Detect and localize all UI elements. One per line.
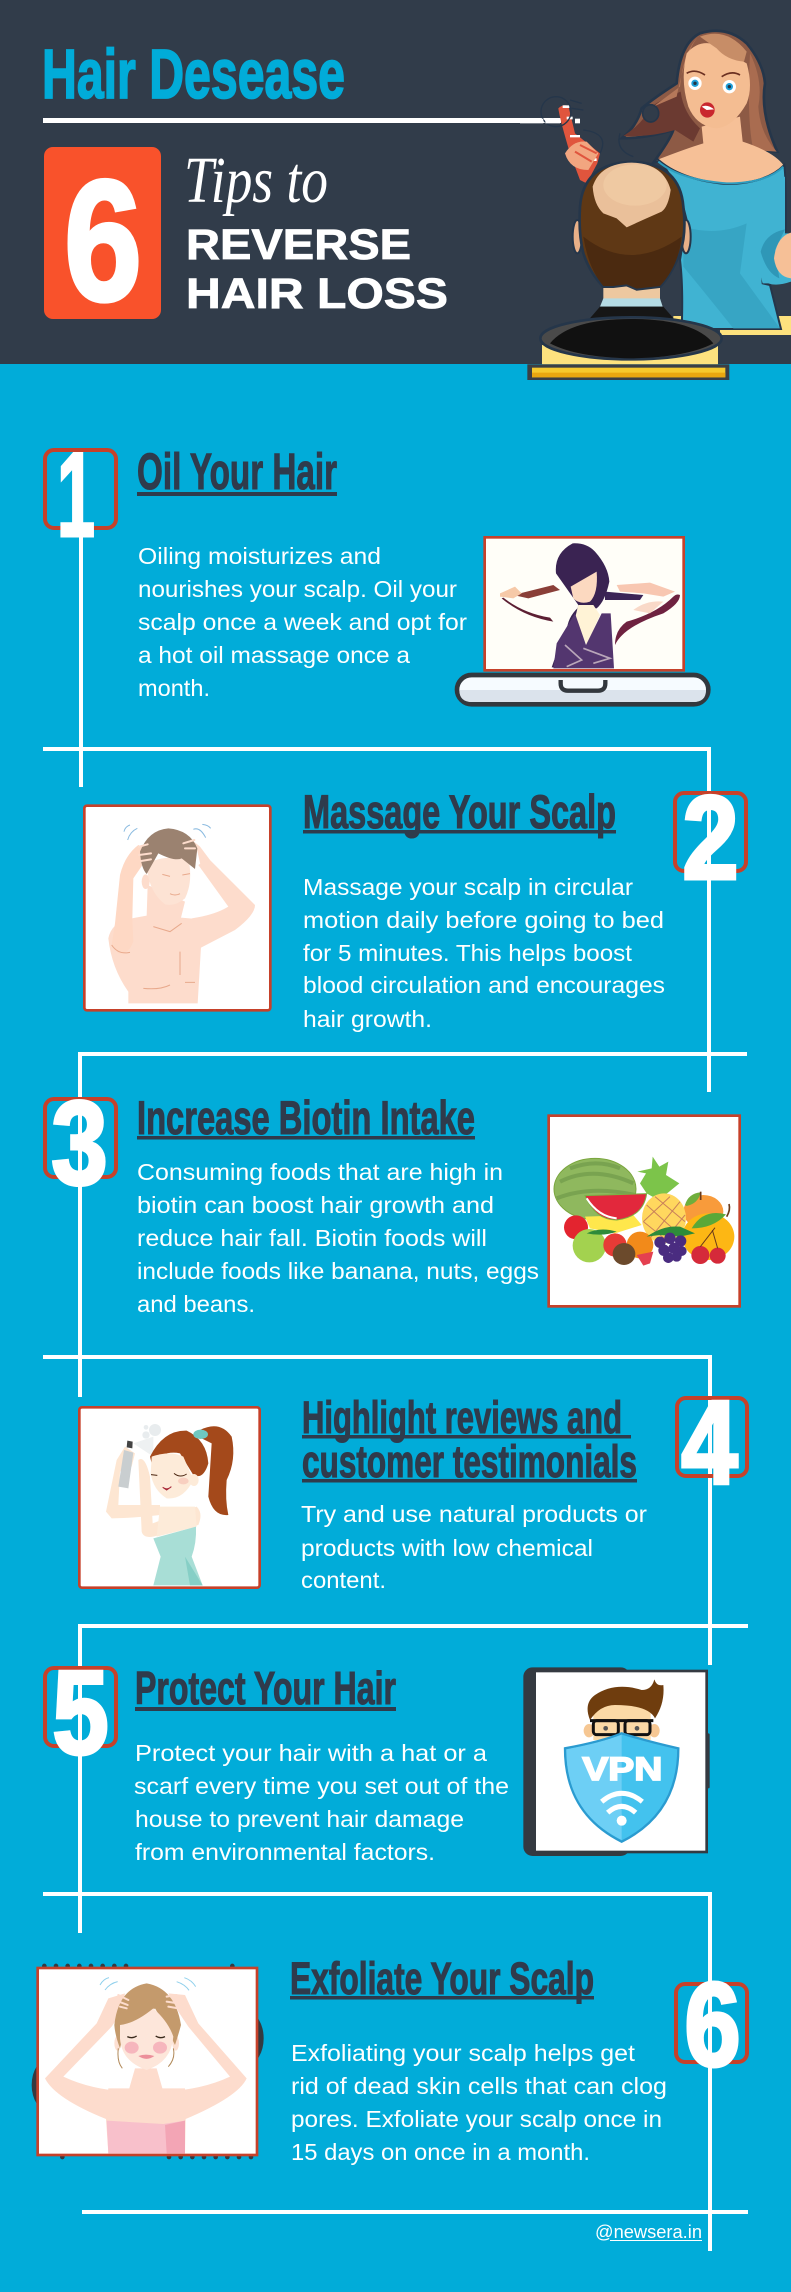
number 4: 4 bbox=[681, 1376, 738, 1510]
icon: woman combing bald man bbox=[520, 31, 791, 380]
body 3 bbox=[137, 1159, 539, 1317]
number 1: 1 bbox=[57, 428, 95, 562]
body 6: pores. Exfoliate your scalp once in bbox=[291, 2106, 662, 2132]
number 6: 6 bbox=[684, 1958, 741, 2092]
body 3: and beans. bbox=[137, 1291, 255, 1317]
body 4: Try and use natural products or bbox=[301, 1501, 647, 1527]
image: fruits bbox=[549, 1116, 740, 1306]
body 5: Protect your hair with a hat or a bbox=[135, 1740, 487, 1766]
heading 5 bbox=[135, 1662, 396, 1714]
heading 4: Highlight reviews and bbox=[302, 1392, 622, 1443]
body 6: Exfoliating your scalp helps get bbox=[291, 2040, 636, 2066]
heading 3 bbox=[137, 1091, 475, 1144]
heading 2 bbox=[303, 785, 616, 838]
heading 5: Protect Your Hair bbox=[135, 1662, 396, 1714]
body 6 bbox=[291, 2040, 667, 2165]
image: woman on laptop bbox=[457, 537, 708, 704]
body 4 bbox=[301, 1501, 647, 1593]
panel: header bbox=[0, 0, 791, 380]
image: VPN shield with man bbox=[523, 1667, 710, 1856]
body 5: from environmental factors. bbox=[135, 1839, 435, 1865]
heading 4 bbox=[302, 1392, 637, 1487]
body 6: rid of dead skin cells that can clog bbox=[291, 2073, 667, 2099]
body 6: 15 days on once in a month. bbox=[291, 2139, 590, 2165]
woman chest bbox=[657, 117, 783, 185]
timeline lines bbox=[43, 535, 748, 2251]
body 4: products with low chemical bbox=[301, 1535, 593, 1561]
woman hair bbox=[622, 31, 777, 163]
body 3: Consuming foods that are high in bbox=[137, 1159, 503, 1185]
body 2: hair growth. bbox=[303, 1006, 432, 1032]
heading 6: Exfoliate Your Scalp bbox=[290, 1953, 594, 2004]
body 2: blood circulation and encourages bbox=[303, 972, 665, 998]
body 3: reduce hair fall. Biotin foods will bbox=[137, 1225, 487, 1251]
footer credit: @newsera.in bbox=[595, 2222, 702, 2242]
comb and hand bbox=[558, 105, 600, 183]
panel: step 6 bbox=[32, 1953, 747, 2165]
number 3: 3 bbox=[51, 1076, 108, 1210]
body 2: motion daily before going to bed bbox=[303, 907, 664, 933]
body 1: nourishes your scalp. Oil your bbox=[138, 576, 457, 602]
body 1 bbox=[138, 543, 467, 701]
heading 3: Increase Biotin Intake bbox=[137, 1091, 475, 1144]
subtitle script: Tips to bbox=[184, 144, 328, 217]
big number badge: 6 bbox=[64, 145, 142, 337]
body 1: Oiling moisturizes and bbox=[138, 543, 381, 569]
body 5 bbox=[134, 1740, 509, 1865]
title: Hair Desease bbox=[42, 35, 345, 113]
panel: step 4 bbox=[79, 1376, 747, 1593]
subtitle bold: REVERSE bbox=[186, 221, 411, 269]
panel: step 3 bbox=[45, 1076, 740, 1317]
panel: step 5 bbox=[45, 1646, 710, 1865]
number 5: 5 bbox=[52, 1646, 109, 1780]
subtitle bold bbox=[186, 221, 448, 318]
body 3: biotin can boost hair growth and bbox=[137, 1192, 494, 1218]
subtitle bold: HAIR LOSS bbox=[186, 270, 448, 318]
panel: step 2 bbox=[84, 771, 746, 1032]
body 1: month. bbox=[138, 675, 210, 701]
image: woman spraying hair bbox=[79, 1407, 260, 1588]
number 2: 2 bbox=[682, 771, 739, 905]
image: VPN shield with man: VPN bbox=[582, 1750, 662, 1787]
image: woman massaging scalp bbox=[32, 1964, 264, 2159]
body 3: include foods like banana, nuts, eggs bbox=[137, 1258, 539, 1284]
body 2: for 5 minutes. This helps boost bbox=[303, 940, 633, 966]
body 4: content. bbox=[301, 1567, 386, 1593]
heading 4: customer testimonials bbox=[302, 1436, 637, 1487]
heading 1 bbox=[137, 443, 337, 500]
body 1: a hot oil massage once a bbox=[138, 642, 410, 668]
body 2 bbox=[303, 874, 665, 1032]
body 5: scarf every time you set out of the bbox=[134, 1773, 509, 1799]
panel: step 1 bbox=[45, 428, 708, 704]
body 1: scalp once a week and opt for bbox=[138, 609, 467, 635]
heading 2: Massage Your Scalp bbox=[303, 785, 616, 838]
man head bbox=[573, 220, 582, 253]
heading 1: Oil Your Hair bbox=[137, 443, 337, 500]
image: man massaging scalp bbox=[84, 806, 270, 1010]
woman dress bbox=[657, 158, 786, 329]
woman face bbox=[684, 43, 750, 128]
body 2: Massage your scalp in circular bbox=[303, 874, 633, 900]
body 5: house to prevent hair damage bbox=[135, 1806, 464, 1832]
